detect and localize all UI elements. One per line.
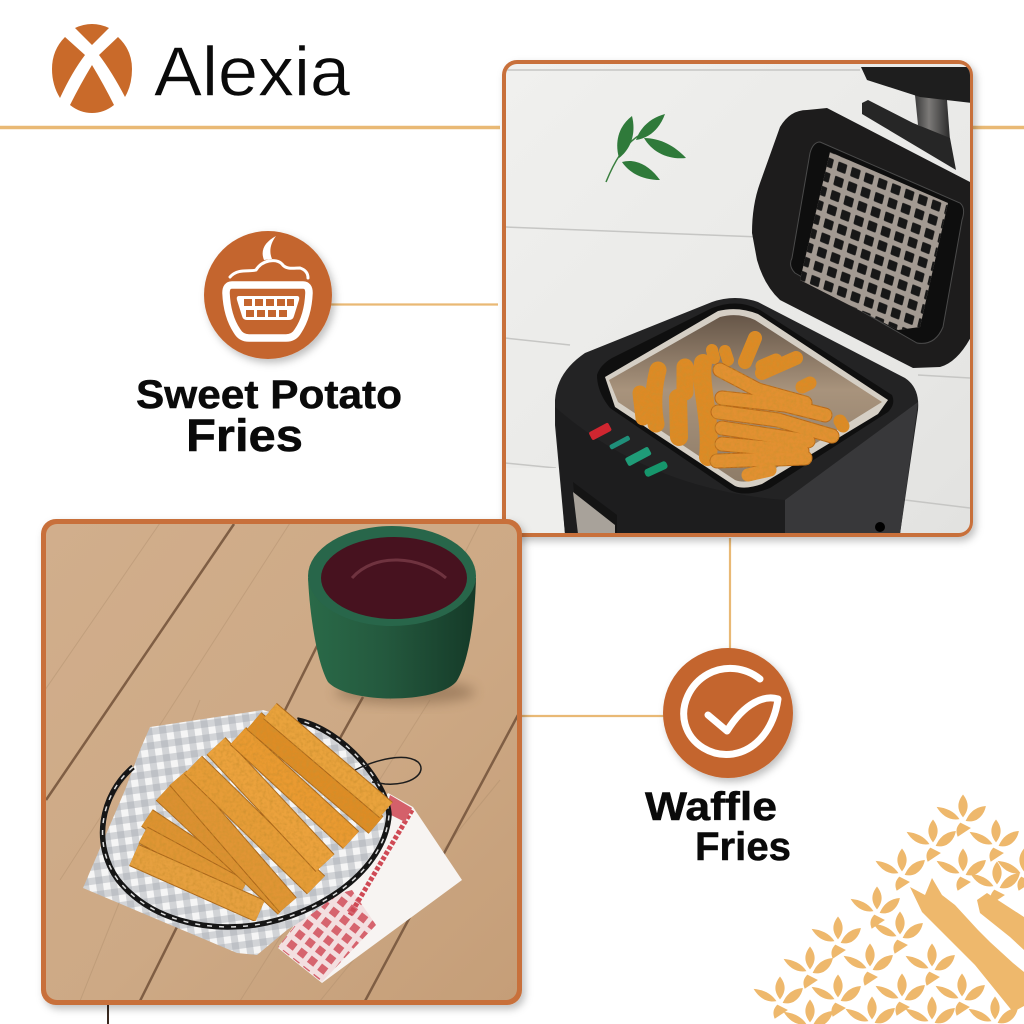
panel: fries on plate photo [41,519,522,1005]
icon: waffle check [663,648,793,778]
fries in basket [640,338,843,475]
heading: Sweet Potato Fries: Fries [186,410,303,461]
icon: green leaves [606,114,686,182]
fryer lid [752,108,972,368]
wire loop [355,757,421,784]
heading: Waffle Fries: Waffle [645,785,777,829]
fries on plate [134,711,386,911]
decorative leaf pattern [754,795,1024,1024]
gingham napkin [83,710,389,955]
logo mark [52,24,132,113]
brand name: Alexia [154,32,350,110]
fryer basket [597,303,893,494]
wall planks background [505,63,970,534]
fryer hinge [861,67,972,170]
heading: Waffle Fries [645,785,791,869]
heading: Sweet Potato Fries [136,373,402,461]
icon: sweet potato bowl [204,231,332,359]
fryer control buttons [588,422,669,478]
logo: Alexia [52,24,350,113]
fryer body [555,298,918,534]
lid grate [800,152,948,330]
wood table [45,523,518,1001]
heading: Sweet Potato Fries: Sweet Potato [136,373,402,417]
plate rim [103,720,389,927]
heading: Waffle Fries: Fries [695,825,791,869]
panel: air fryer photo [502,60,973,537]
white and red napkin [278,793,462,983]
sauce cup [308,526,476,704]
